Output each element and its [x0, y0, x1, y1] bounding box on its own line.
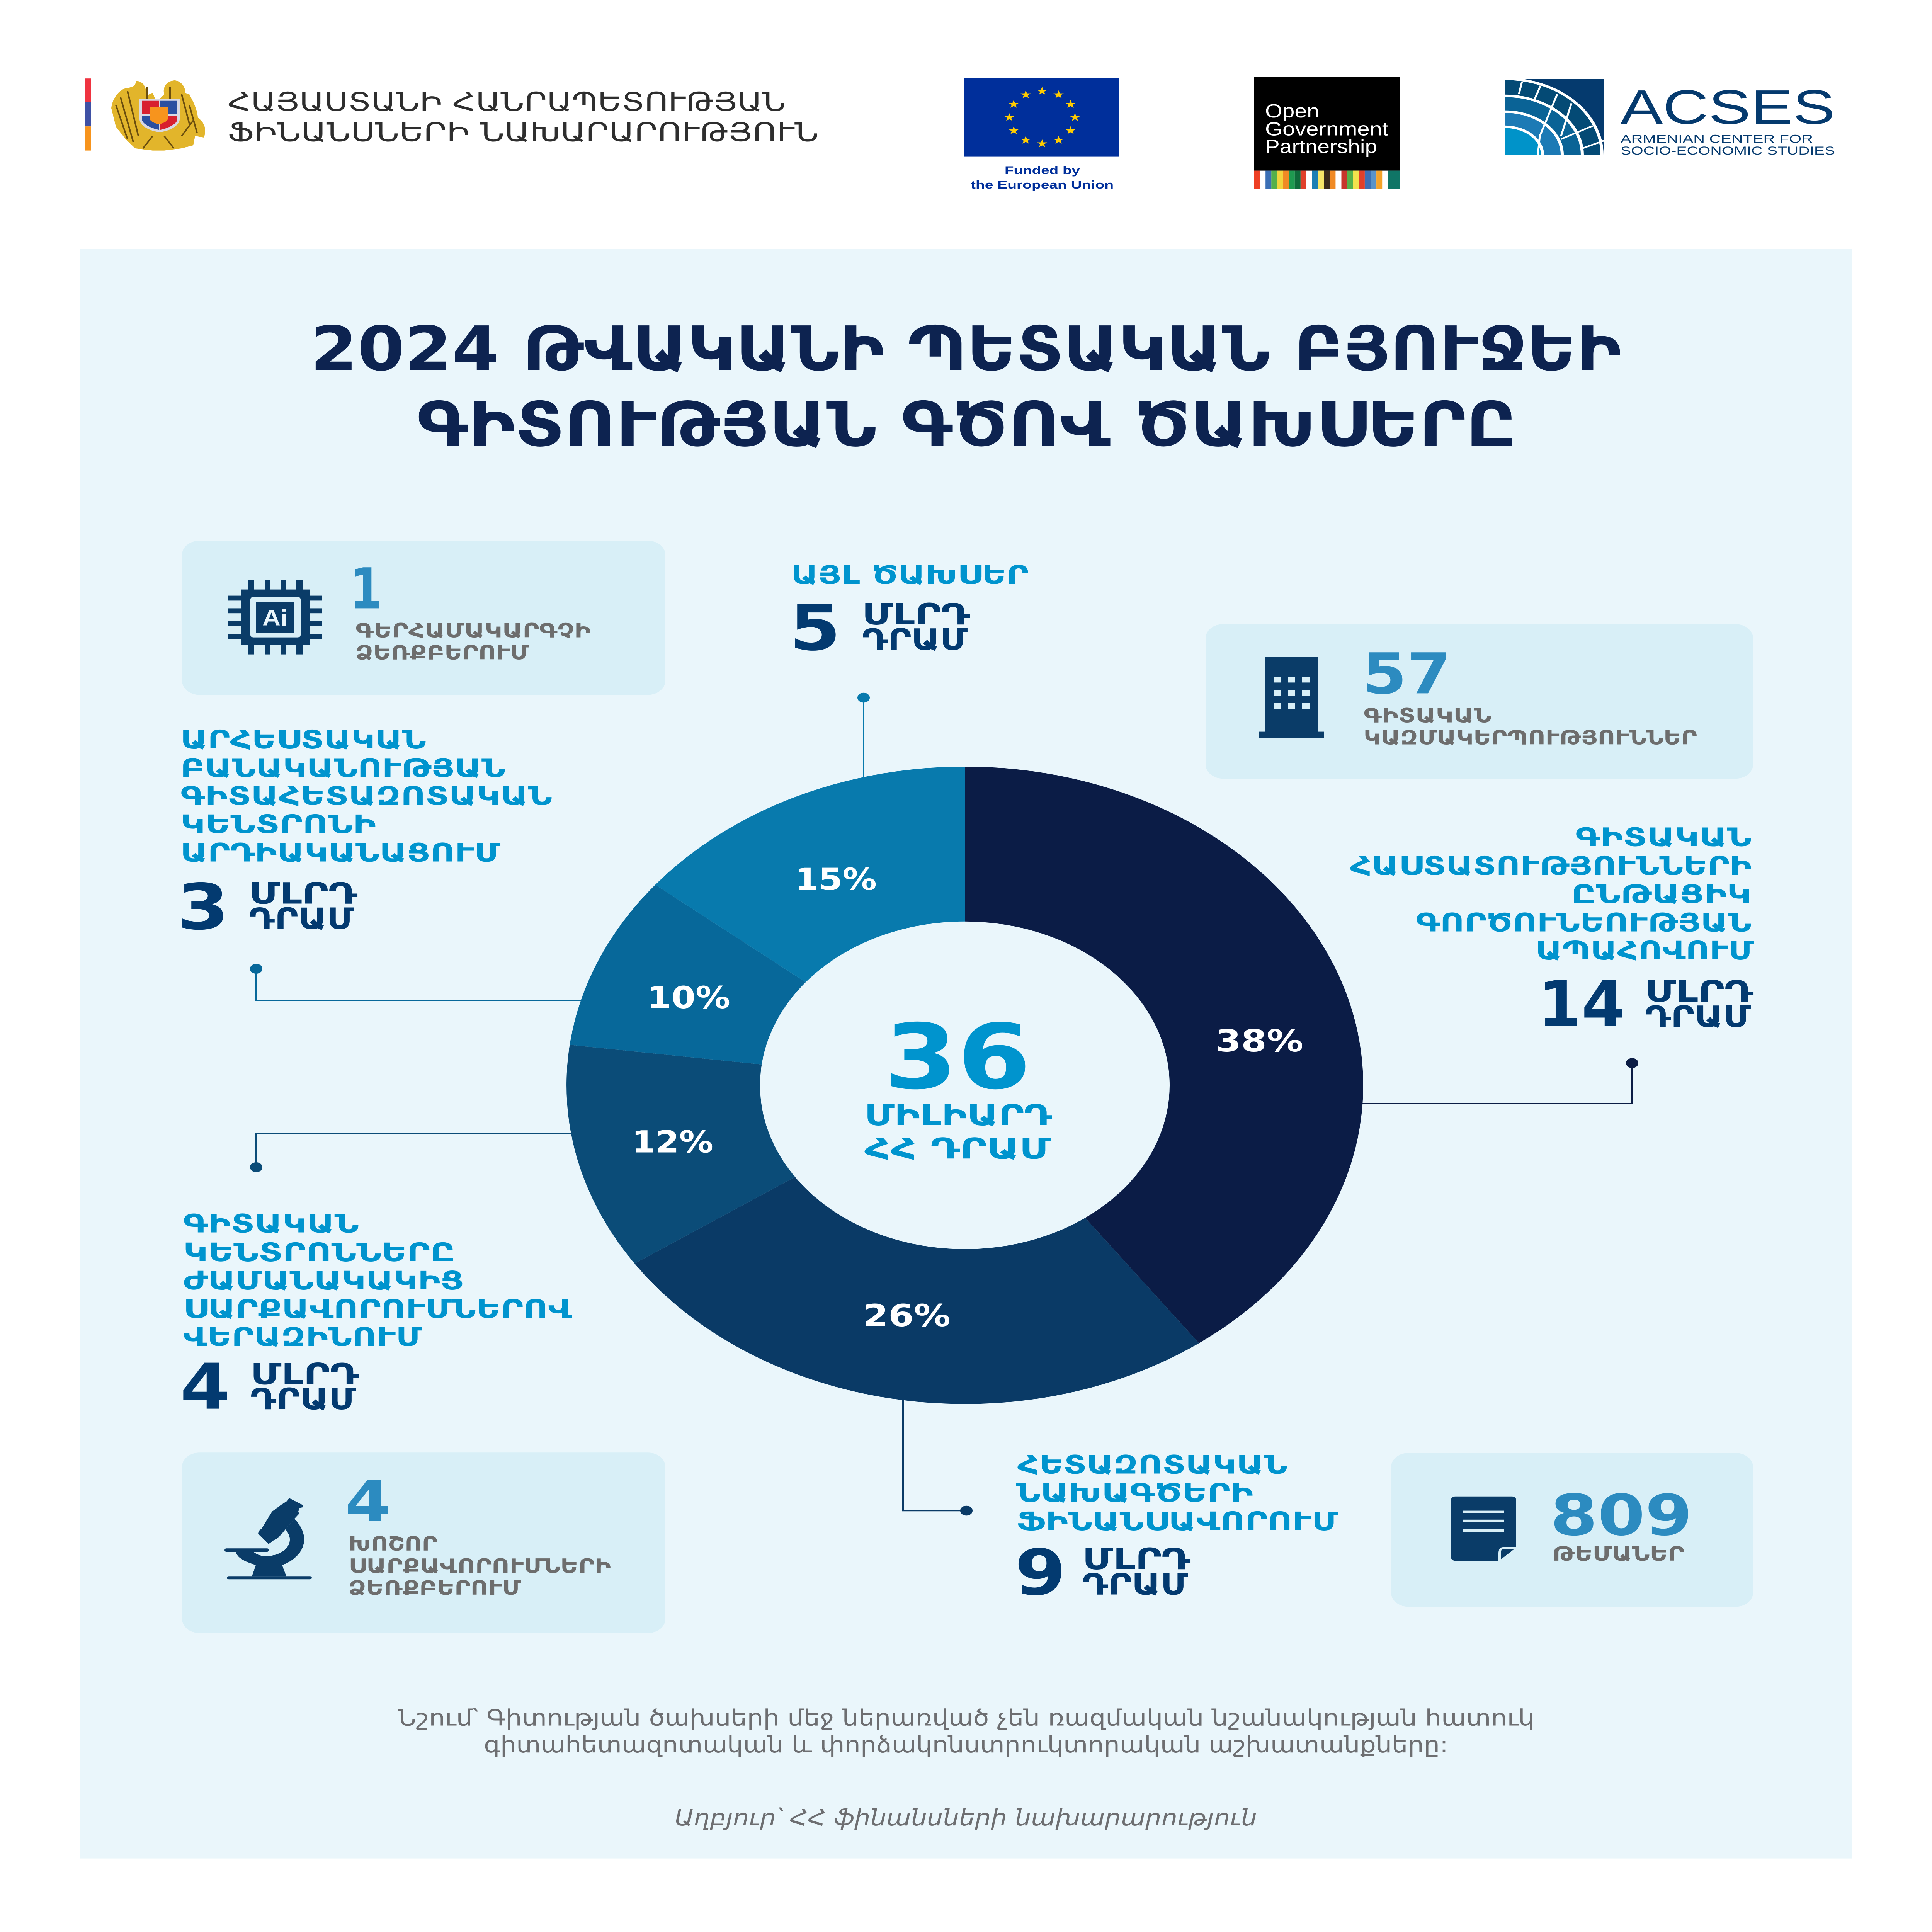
- card label: ՁԵՌՔԲԵՐՈՒՄ: [349, 1577, 521, 1600]
- percent labels: 15%: [795, 862, 877, 897]
- number: 57: 57: [1362, 641, 1451, 707]
- stat: research projects: ԴՐԱՄ: [1082, 1568, 1189, 1602]
- stat: research centers equipment: ԺԱՄԱՆԱԿԱԿԻՑ: [183, 1266, 464, 1296]
- stat: research centers equipment: 4: [180, 1350, 230, 1423]
- stat: art research center: ԴՐԱՄ: [249, 902, 355, 936]
- stat: research projects: ՖԻՆԱՆՍԱՎՈՐՈՒՄ: [1017, 1507, 1338, 1536]
- card: large equipment: [182, 1452, 665, 1633]
- footnote: գիտահետազոտական և փորձակոնստրուկտորական աշխատանքները:: [484, 1732, 1448, 1758]
- card label: ԳԻՏԱԿԱՆ: [1364, 705, 1492, 727]
- number: 4: 4: [345, 1469, 391, 1534]
- stat: scientific institutions: [1350, 823, 1754, 1041]
- stat: scientific institutions: ՄԼՐԴ: [1645, 975, 1753, 1009]
- stat: scientific institutions: 14: [1538, 968, 1625, 1041]
- card label: ՍԱՐՔԱՎՈՐՈՒՄՆԵՐԻ: [349, 1555, 611, 1578]
- stat: other spending: ԴՐԱՄ: [862, 623, 968, 657]
- percent labels: [632, 862, 1303, 1333]
- leader line: other spending: [857, 693, 870, 778]
- percent labels: 10%: [647, 980, 730, 1015]
- logo: ACSES: [1505, 79, 1835, 155]
- ogp stripes: [1254, 171, 1400, 189]
- card label: [355, 620, 591, 664]
- stat: art research center: ԱՐՀԵՍՏԱԿԱՆ: [180, 725, 426, 755]
- title: [310, 314, 1621, 461]
- card label: ԹԵՄԱՆԵՐ: [1552, 1543, 1684, 1566]
- stat: research projects: ՄԼՐԴ: [1082, 1542, 1190, 1576]
- card label: ՁԵՌՔԲԵՐՈՒՄ: [355, 641, 529, 664]
- stat: art research center: ՄԼՐԴ: [249, 877, 357, 911]
- slice 15%: [655, 767, 965, 982]
- percent labels: 26%: [863, 1298, 951, 1333]
- icon: ACSES arches: [1505, 79, 1604, 155]
- donut chart: [566, 767, 1363, 1404]
- ACSES wordmark: ACSES: [1621, 80, 1835, 134]
- stat: research projects: ՆԱԽԱԳԾԵՐԻ: [1016, 1478, 1253, 1508]
- stat: art research center: [177, 725, 552, 944]
- stat: other spending: 5: [789, 592, 841, 665]
- leader line: research centers: [251, 1134, 572, 1172]
- percent labels: 38%: [1216, 1023, 1303, 1058]
- icon: building: [1259, 657, 1324, 738]
- card: topics: [1391, 1453, 1753, 1607]
- stat: scientific institutions: ԸՆԹԱՑԻԿ: [1571, 879, 1752, 909]
- stat: research projects: ՀԵՏԱԶՈՏԱԿԱՆ: [1017, 1450, 1287, 1480]
- stat: research centers equipment: ՎԵՐԱԶԻՆՈՒՄ: [183, 1322, 422, 1352]
- stat: scientific institutions: ԱՊԱՀՈՎՈՒՄ: [1536, 936, 1754, 966]
- stat: art research center: ԲԱՆԱԿԱՆՈՒԹՅԱՆ: [180, 753, 505, 783]
- ogp text: Government: [1265, 118, 1388, 139]
- flag bar: [85, 78, 91, 151]
- stat: research centers equipment: ԿԵՆՏՐՈՆՆԵՐԸ: [183, 1238, 455, 1267]
- stat: research centers equipment: ՄԼՐԴ: [250, 1357, 359, 1391]
- icon: document: [1451, 1497, 1516, 1561]
- card label: ԳԵՐՀԱՄԱԿԱՐԳՉԻ: [355, 620, 591, 642]
- stat: scientific institutions: ԳԻՏԱԿԱՆ: [1575, 823, 1752, 852]
- logo: ministry of finance: [85, 78, 819, 151]
- stat: research centers equipment: ՍԱՐՔԱՎՈՐՈՒՄՆԵՐՈՎ: [183, 1294, 573, 1324]
- icon: AI chip: [228, 580, 322, 655]
- stat: research projects: [1015, 1450, 1338, 1609]
- card label: [1364, 705, 1697, 749]
- slice 12%: [566, 1045, 795, 1264]
- stat: research centers equipment: ԴՐԱՄ: [250, 1382, 357, 1417]
- donut center total: ՀՀ ԴՐԱՄ: [864, 1132, 1051, 1165]
- stat: research projects: 9: [1015, 1536, 1066, 1609]
- ogp text: Open: [1265, 100, 1319, 122]
- funded by text: the European Union: [971, 178, 1114, 191]
- ministry name: [228, 87, 819, 148]
- stat: research centers equipment: [180, 1209, 573, 1423]
- logo: european union: [964, 78, 1119, 191]
- card label: [349, 1533, 611, 1600]
- stat: art research center: 3: [177, 871, 229, 944]
- stat: other spending: ԱՅԼ ԾԱԽՍԵՐ: [791, 560, 1029, 590]
- stat: art research center: ԳԻՏԱՀԵՏԱԶՈՏԱԿԱՆ: [180, 781, 552, 811]
- ACSES subtitle: SOCIO-ECONOMIC STUDIES: [1621, 145, 1835, 157]
- slice 10%: [570, 885, 806, 1065]
- stat: art research center: ԿԵՆՏՐՈՆԻ: [180, 810, 376, 839]
- stat: art research center: ԱՐԴԻԱԿԱՆԱՑՈՒՄ: [180, 838, 500, 868]
- leader line: research projects: [903, 1397, 972, 1515]
- slice 38%: [965, 767, 1363, 1343]
- funded by text: [971, 164, 1114, 191]
- number: 809: 809: [1550, 1483, 1692, 1548]
- stat: scientific institutions: ԴՐԱՄ: [1645, 1000, 1751, 1034]
- card: AI supercomputer: [182, 541, 665, 695]
- ogp text: [1265, 100, 1388, 157]
- funded by text: Funded by: [1005, 164, 1080, 177]
- ogp text: Partnership: [1265, 136, 1377, 157]
- leader line: art center: [251, 964, 582, 1000]
- stat: other spending: [789, 560, 1029, 665]
- icon: AI chip: Ai: [262, 605, 287, 630]
- ministry name: ՖԻՆԱՆՍՆԵՐԻ ՆԱԽԱՐԱՐՈՒԹՅՈՒՆ: [228, 117, 819, 148]
- stat: other spending: ՄԼՐԴ: [862, 597, 970, 632]
- number: 1: 1: [350, 556, 383, 622]
- stat: research centers equipment: ԳԻՏԱԿԱՆ: [183, 1209, 359, 1239]
- icon: coat of arms: [111, 80, 205, 151]
- donut center total: [864, 1005, 1052, 1165]
- donut center total: 36: [884, 1005, 1031, 1109]
- percent labels: 12%: [632, 1124, 713, 1160]
- card: scientific organizations: [1206, 624, 1753, 779]
- ACSES subtitle: ARMENIAN CENTER FOR: [1621, 133, 1813, 146]
- slice 26%: [634, 1177, 1199, 1404]
- main panel background: [80, 249, 1852, 1859]
- card label: ԿԱԶՄԱԿԵՐՊՈՒԹՅՈՒՆՆԵՐ: [1364, 726, 1697, 749]
- footnote: Նշում՝ Գիտության ծախսերի մեջ ներառված չեն ռազմական նշանակության հատուկ: [398, 1705, 1534, 1731]
- card label: ԽՈՇՈՐ: [349, 1533, 437, 1555]
- leader line: institutions: [1362, 1059, 1638, 1104]
- stat: scientific institutions: ՀԱՍՏԱՏՈՒԹՅՈՒՆՆԵՐԻ: [1350, 851, 1752, 881]
- icon: EU stars: [1004, 87, 1080, 147]
- donut center total: ՄԻԼԻԱՐԴ: [864, 1099, 1052, 1132]
- stat: scientific institutions: ԳՈՐԾՈՒՆԵՈՒԹՅԱՆ: [1416, 908, 1752, 937]
- ministry name: ՀԱՅԱՍՏԱՆԻ ՀԱՆՐԱՊԵՏՈՒԹՅԱՆ: [228, 87, 786, 117]
- title: ԳԻՏՈՒԹՅԱՆ ԳԾՈՎ ԾԱԽՍԵՐԸ: [417, 389, 1517, 461]
- footnote: [398, 1705, 1534, 1758]
- title: 2024 ԹՎԱԿԱՆԻ ՊԵՏԱԿԱՆ ԲՅՈՒՋԵԻ: [310, 314, 1621, 385]
- ACSES subtitle: [1621, 133, 1835, 157]
- source: Աղբյուր՝ ՀՀ ֆինանսների նախարարություն: [675, 1805, 1257, 1831]
- logo: open government partnership: [1254, 77, 1400, 189]
- icon: microscope: [224, 1498, 312, 1579]
